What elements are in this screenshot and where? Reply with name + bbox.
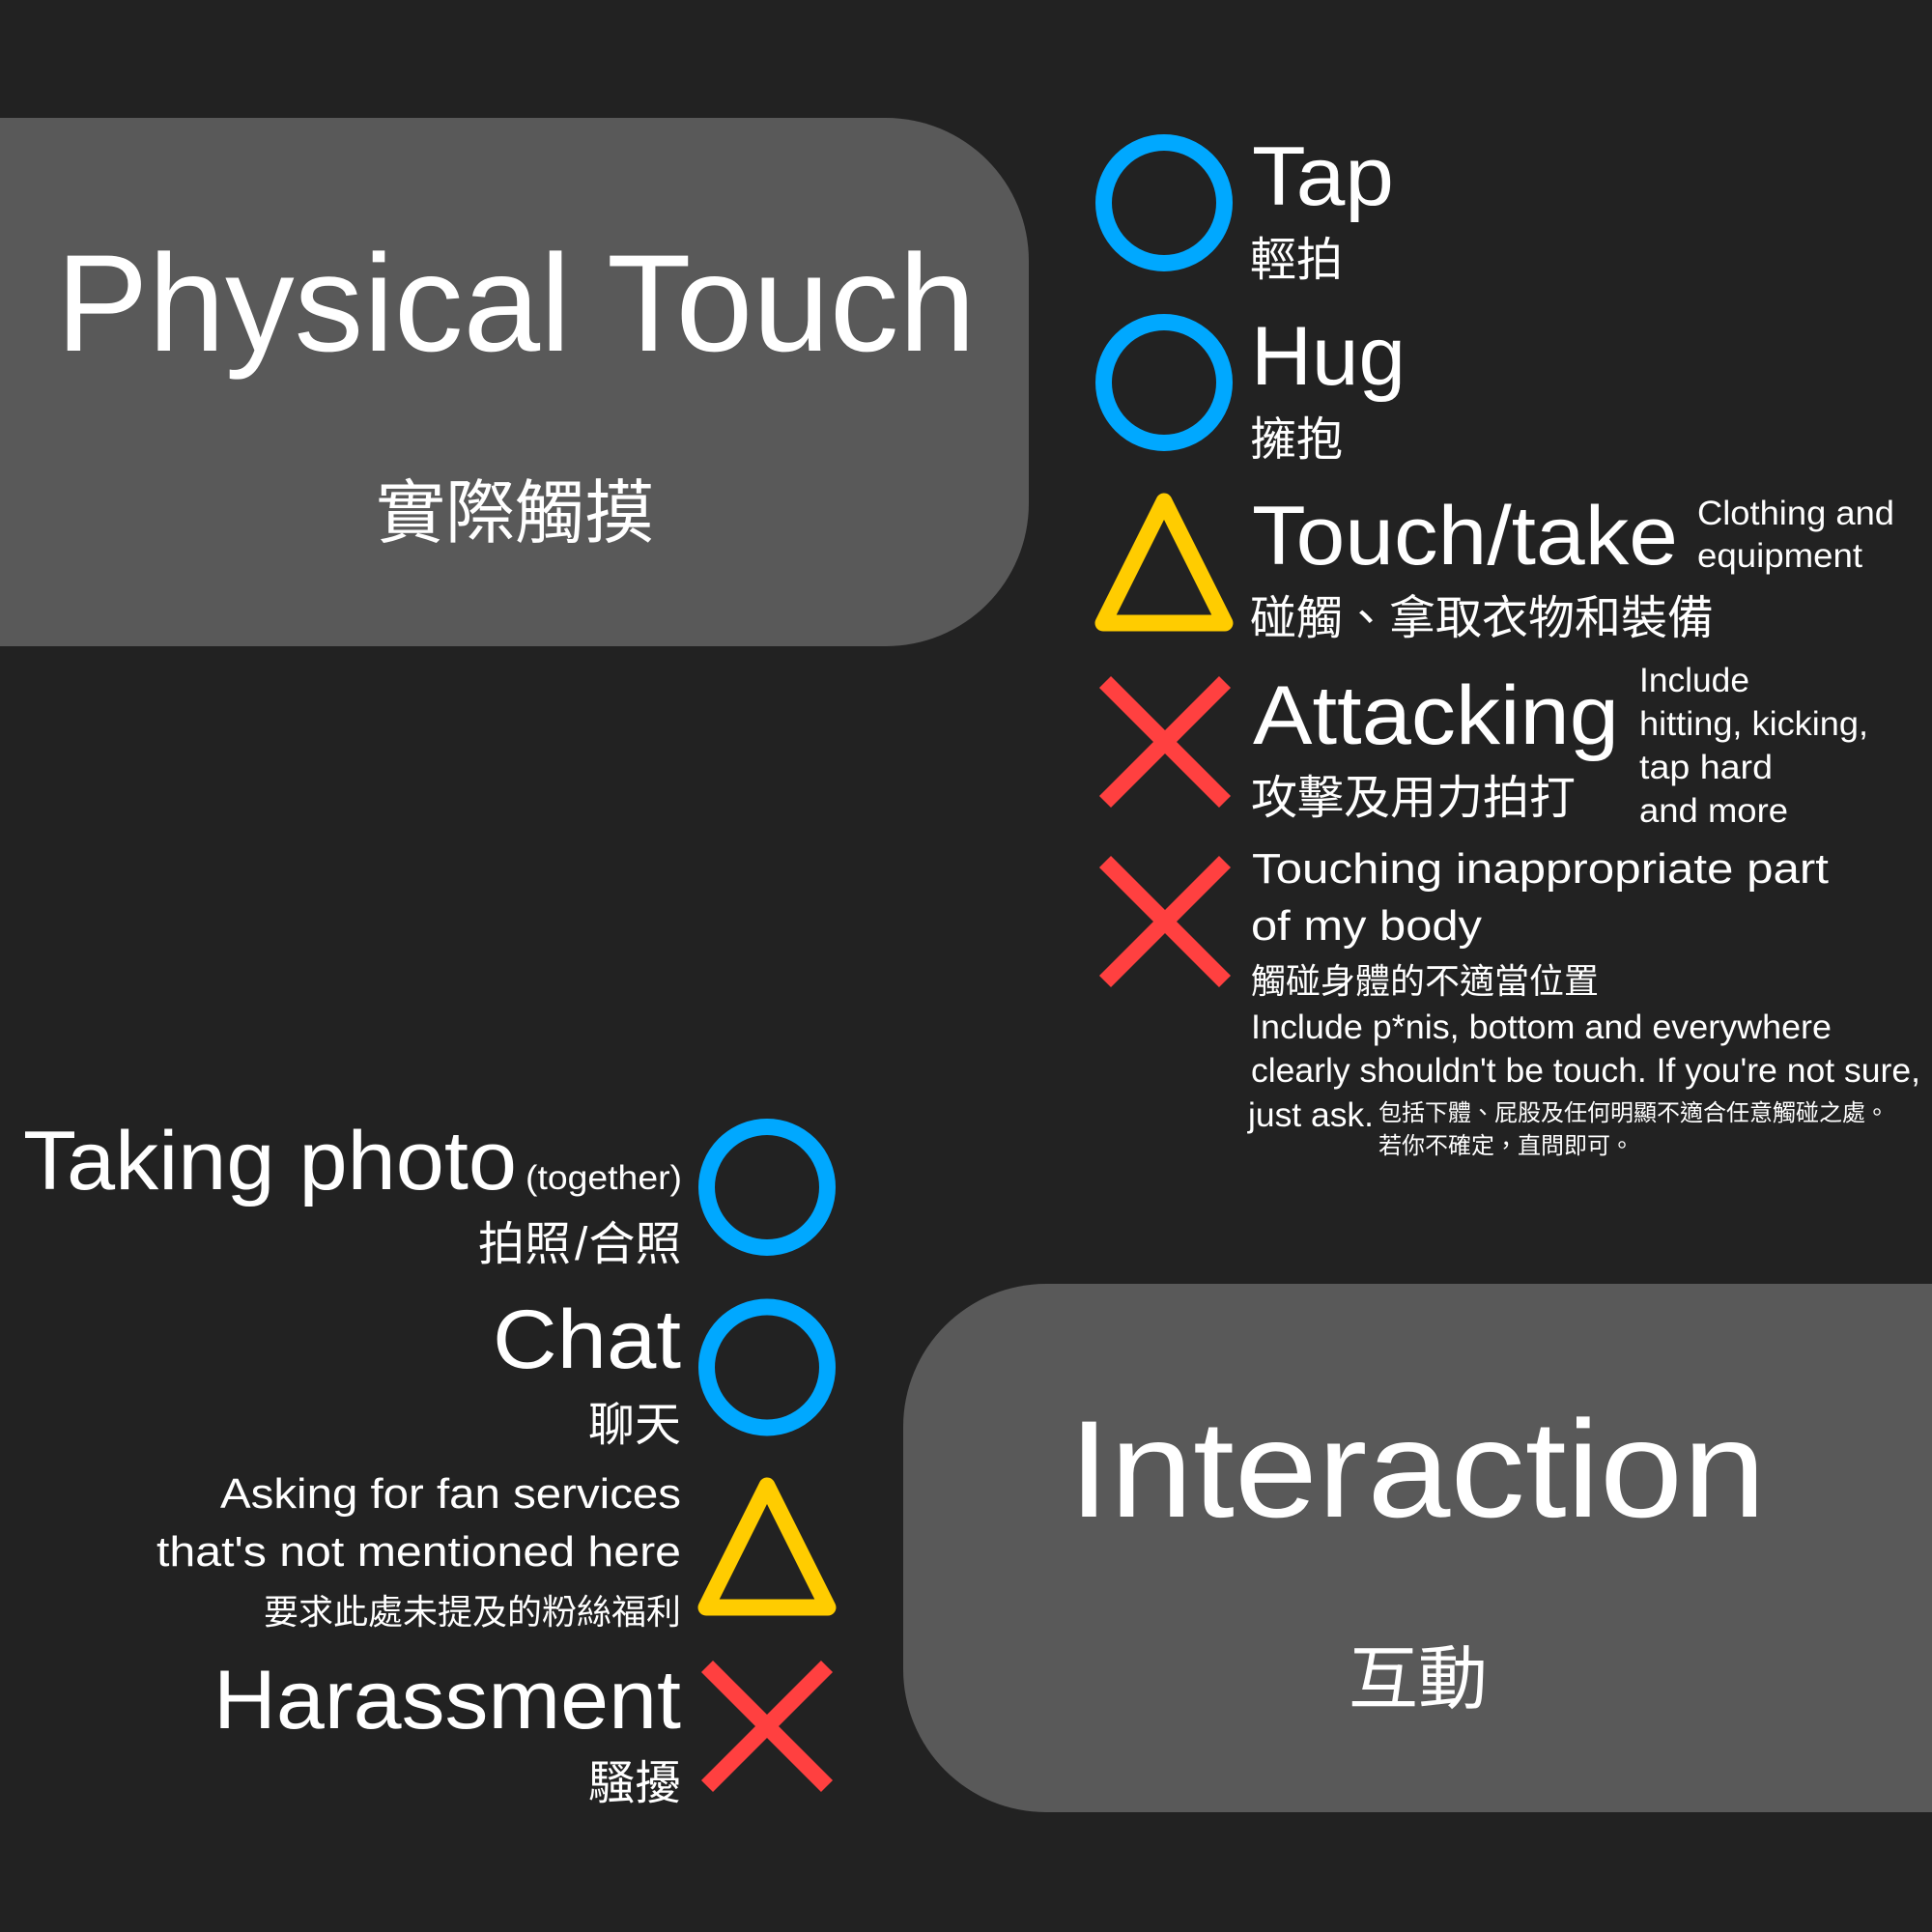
row: Tap	[1103, 130, 1394, 286]
icon: blue circle	[707, 1307, 827, 1428]
note: (together): (together)	[526, 1159, 682, 1197]
label: Touch/take: Touch/take	[1252, 490, 1678, 582]
icon: blue circle	[707, 1126, 827, 1248]
note: clearly line: clearly shouldn't be touch. If you're not sure,	[1251, 1052, 1920, 1090]
label: 拍照/合照: 拍照/合照	[478, 1219, 681, 1270]
label: 輕拍: 輕拍	[1250, 235, 1343, 286]
subtitle: 互動: 互動	[1349, 1641, 1488, 1719]
icon: red cross	[707, 1666, 827, 1786]
note: equipment: equipment	[1697, 537, 1862, 575]
label: 觸碰身體的不適當位置: 觸碰身體的不適當位置	[1251, 961, 1599, 1001]
title: Interaction: Interaction	[1068, 1393, 1766, 1547]
panel: Interaction header	[903, 1284, 1932, 1812]
label: of my body: of my body	[1251, 902, 1482, 950]
label: 碰觸、拿取衣物和裝備: 碰觸、拿取衣物和裝備	[1250, 593, 1714, 644]
label: 聊天: 聊天	[588, 1400, 681, 1451]
label: Tap: Tap	[1252, 130, 1394, 223]
note: just ask: just ask.	[1247, 1096, 1374, 1134]
note: Include: Include	[1639, 662, 1749, 699]
icon: red cross	[1105, 682, 1225, 802]
label: Touching inappropriate part: Touching inappropriate part	[1252, 845, 1829, 893]
icon: red cross	[1105, 862, 1225, 981]
label: 騷擾: 騷擾	[588, 1758, 681, 1809]
label: Hug: Hug	[1251, 310, 1406, 403]
label: 要求此處未提及的粉絲福利: 要求此處未提及的粉絲福利	[264, 1592, 681, 1632]
row: Touch/take	[1103, 490, 1894, 644]
note: Include line: Include p*nis, bottom and everywhere	[1251, 1009, 1832, 1046]
note: Clothing and: Clothing and	[1697, 495, 1894, 532]
label: that's not mentioned here: that's not mentioned here	[156, 1528, 681, 1576]
row: Touching inappropriate part	[1105, 845, 1920, 1159]
note: 若你 line: 若你不確定，直問即可。	[1378, 1133, 1634, 1159]
label: Chat: Chat	[493, 1293, 681, 1386]
row: Taking photo	[23, 1115, 827, 1270]
row: Hug	[1103, 310, 1406, 466]
icon: blue circle	[1103, 143, 1225, 263]
note: and more: and more	[1639, 792, 1788, 830]
label: 擁抱: 擁抱	[1250, 414, 1343, 466]
row: Harassment	[213, 1654, 827, 1809]
label: Asking for fan services: Asking for fan services	[220, 1470, 681, 1518]
subtitle: 實際觸摸: 實際觸摸	[376, 475, 654, 553]
panel: Physical Touch header	[0, 118, 1029, 646]
row: Asking for fan services	[156, 1470, 828, 1632]
label: Harassment: Harassment	[213, 1654, 681, 1747]
icon: yellow triangle	[1103, 501, 1225, 623]
row: Attacking	[1105, 662, 1868, 830]
label: 攻擊及用力拍打: 攻擊及用力拍打	[1251, 773, 1576, 824]
title: Physical Touch: Physical Touch	[56, 227, 976, 381]
label: Attacking: Attacking	[1253, 669, 1619, 762]
label: Taking photo: Taking photo	[23, 1115, 517, 1208]
note: hitting, kicking,: hitting, kicking,	[1639, 705, 1868, 743]
icon: blue circle	[1103, 323, 1225, 442]
icon: yellow triangle	[706, 1486, 828, 1607]
note: tap hard: tap hard	[1639, 749, 1773, 786]
row: Chat	[493, 1293, 827, 1451]
note: 包括 line: 包括下體、屁股及任何明顯不適合任意觸碰之處。	[1378, 1100, 1889, 1126]
